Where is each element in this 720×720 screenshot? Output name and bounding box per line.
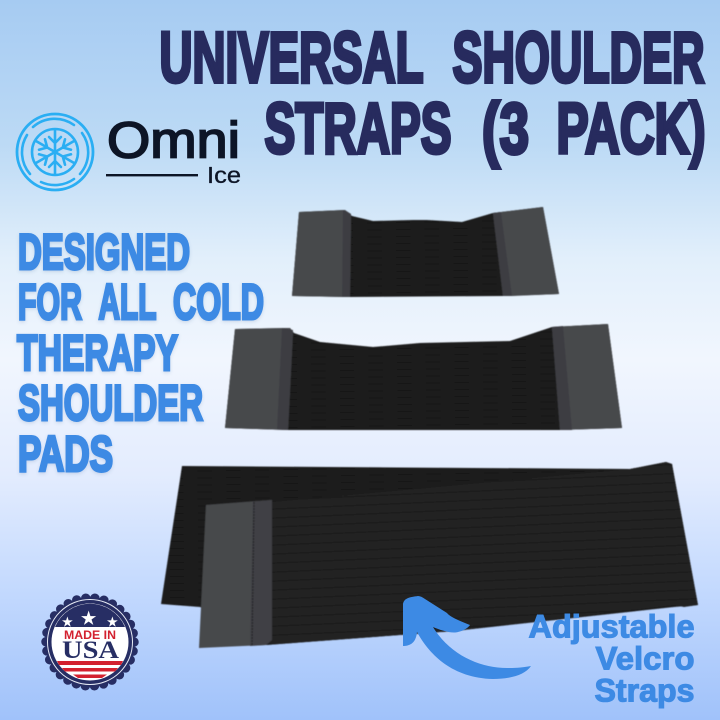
heading: designed for all cold therapy shoulder pads: SHOULDER (18, 374, 203, 431)
badge: made in USA: USA (62, 637, 119, 664)
callout: adjustable velcro straps: Velcro (596, 640, 694, 676)
logo wordmark: Omni (107, 112, 240, 168)
heading: designed for all cold therapy shoulder pads (17, 223, 264, 482)
heading: designed for all cold therapy shoulder pads: PADS (18, 425, 113, 482)
strap back layer (161, 462, 698, 645)
callout: adjustable velcro straps: Adjustable (528, 608, 694, 644)
badge text: MADE IN (64, 630, 116, 642)
strap front layer (266, 462, 698, 645)
velcro flap (199, 500, 272, 648)
badge stars (62, 609, 118, 629)
title (160, 19, 706, 169)
medium strap (225, 324, 622, 430)
heading: designed for all cold therapy shoulder pads: THERAPY (17, 324, 178, 381)
title: UNIVERSAL (160, 19, 424, 98)
badge stripes (57, 661, 123, 665)
heading: designed for all cold therapy shoulder pads: FOR (18, 273, 82, 330)
callout: adjustable velcro straps: Straps (594, 672, 694, 708)
arrow pointing at strap (403, 596, 531, 679)
logo: Omni Ice (17, 112, 241, 190)
small strap (292, 207, 559, 297)
badge: made in USA (46, 598, 134, 686)
heading: designed for all cold therapy shoulder pads: DESIGNED (18, 223, 190, 280)
callout: adjustable velcro straps (528, 608, 694, 708)
logo subtitle: Ice (207, 162, 241, 188)
title: STRAPS (264, 90, 452, 169)
title: (3 (482, 90, 529, 169)
icon: snowflake ring (17, 114, 93, 190)
badge stars: ★ (107, 615, 118, 629)
heading: designed for all cold therapy shoulder pads: COLD (173, 273, 264, 330)
badge stars: ★ (81, 609, 97, 628)
badge stars: ★ (62, 615, 73, 629)
large strap (161, 462, 698, 648)
heading: designed for all cold therapy shoulder pads: ALL (98, 273, 156, 330)
